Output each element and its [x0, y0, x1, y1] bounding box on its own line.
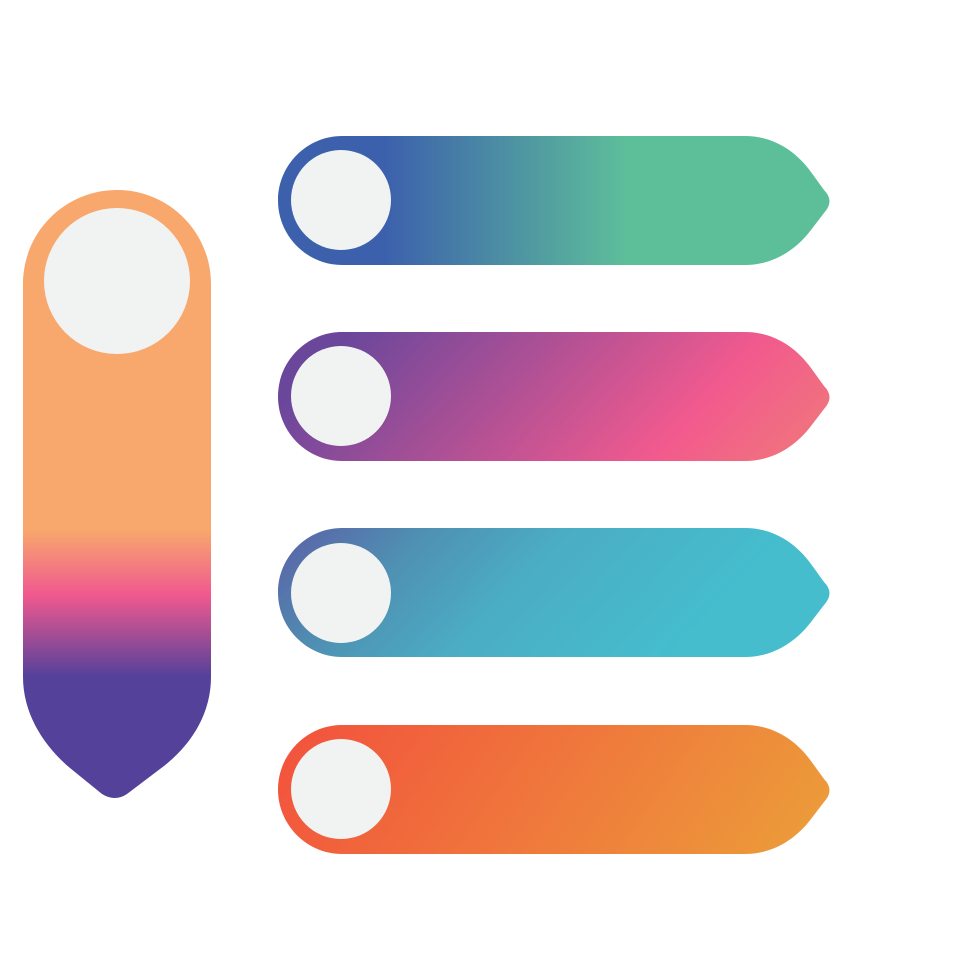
bar 4 circle	[291, 739, 391, 839]
bar 3: steel blue to cyan	[278, 528, 830, 657]
bar 2 circle	[291, 346, 391, 446]
bar 1 circle	[291, 150, 391, 250]
bar 4: red to orange	[278, 725, 830, 854]
vertical panel	[23, 190, 211, 798]
bar 1: blue to green	[278, 136, 830, 265]
vertical panel circle	[44, 208, 190, 354]
bar 3 circle	[291, 543, 391, 643]
bar 2: purple to pink	[278, 332, 830, 461]
